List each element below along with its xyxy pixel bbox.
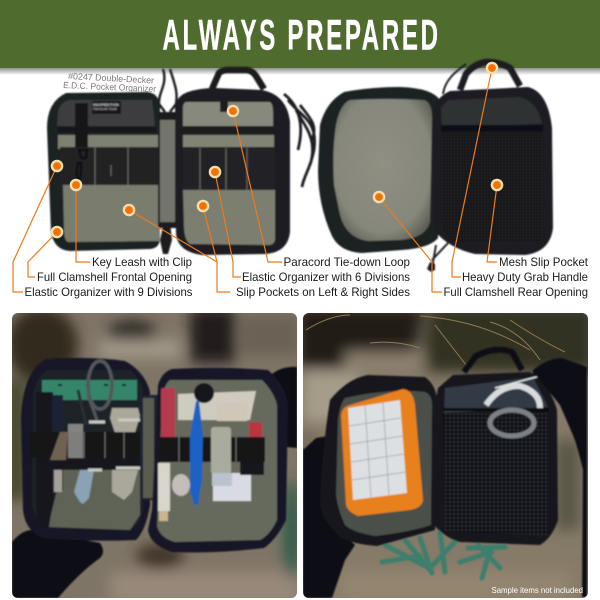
white pen [158, 463, 170, 511]
feature labels: Mesh Slip Pocket [499, 255, 589, 269]
glove bottom left [12, 530, 103, 598]
gauze [172, 474, 190, 496]
pouch diagram: frontal open view: MAXPEDITION [93, 103, 120, 107]
pouch diagram: frontal open view: Hardcore Gear [93, 107, 118, 111]
orange rugged drive [341, 389, 423, 516]
feature labels: Slip Pockets on Left & Right Sides [236, 285, 410, 299]
paracord top loop [159, 69, 177, 112]
silver clip [211, 427, 231, 474]
grab handle [212, 70, 264, 89]
callout markers [51, 62, 503, 238]
dark ground and grass background [296, 306, 595, 600]
drive silver face [348, 400, 407, 500]
pliers [110, 408, 140, 500]
right panel body [175, 88, 290, 255]
grab handle rear [460, 62, 520, 90]
feature labels: Elastic Organizer with 9 Divisions [24, 285, 192, 299]
paracord bottom [160, 222, 172, 254]
blurred outdoor background [6, 307, 301, 600]
paracord side [284, 94, 315, 187]
left glove [303, 436, 355, 598]
right glove [533, 358, 587, 597]
white paper packet [178, 391, 256, 420]
product caption [63, 71, 156, 94]
product caption: E.D.C. Pocket Organizer [63, 80, 156, 94]
brand label [92, 101, 121, 114]
mesh pocket [443, 410, 548, 535]
feature labels: Full Clamshell Rear Opening [444, 285, 588, 299]
rear left panel [318, 87, 440, 253]
strap with elastic [30, 432, 142, 458]
key leash strap and clip [75, 103, 88, 147]
mesh slip pocket [441, 131, 543, 242]
header banner [0, 0, 600, 75]
feature labels: Elastic Organizer with 6 Divisions [242, 270, 410, 284]
elastic right strap [159, 437, 265, 462]
succulent plant [382, 532, 505, 578]
white cable coil [486, 386, 540, 408]
left panel body [47, 92, 160, 251]
rear right panel [433, 87, 553, 255]
right panel [432, 372, 558, 545]
blue tweezers [190, 401, 203, 505]
lower olive lining [48, 470, 140, 530]
pouch diagram: frontal open view [47, 69, 315, 255]
photo: organizer packed with tools [6, 307, 301, 600]
pouch diagram: rear open view [318, 62, 553, 272]
feature labels: Key Leash with Clip [92, 255, 192, 269]
feature labels: Paracord Tie-down Loop [284, 255, 410, 269]
cable through mesh [490, 410, 534, 436]
ring and pouch [194, 383, 214, 403]
carabiner tag [50, 432, 68, 460]
red packet [249, 422, 262, 437]
multitool [36, 392, 53, 497]
right glove over panel [536, 374, 574, 438]
white box [213, 473, 251, 501]
product caption: #0247 Double-Decker [68, 71, 154, 85]
central spine [140, 395, 158, 500]
glove top right [249, 367, 297, 448]
feature labels [24, 255, 589, 299]
left pouch panel [21, 358, 150, 541]
grab handle [464, 350, 522, 372]
left panel [320, 375, 437, 546]
center spine [158, 112, 178, 228]
title: ALWAYS PREPARED [162, 11, 438, 59]
green card [42, 380, 137, 400]
callout leader lines [13, 68, 497, 292]
feature labels: Heavy Duty Grab Handle [462, 270, 588, 284]
red marker [161, 388, 175, 438]
disclaimer: Sample items not included [492, 585, 583, 595]
right pouch panel [148, 368, 288, 552]
bottom paracord [432, 243, 448, 268]
feature labels: Full Clamshell Frontal Opening [37, 270, 192, 284]
grass strands [306, 315, 565, 370]
screwdriver [74, 470, 94, 504]
photo: hard drive and cable in pouch [296, 306, 595, 600]
scissors [78, 361, 112, 425]
